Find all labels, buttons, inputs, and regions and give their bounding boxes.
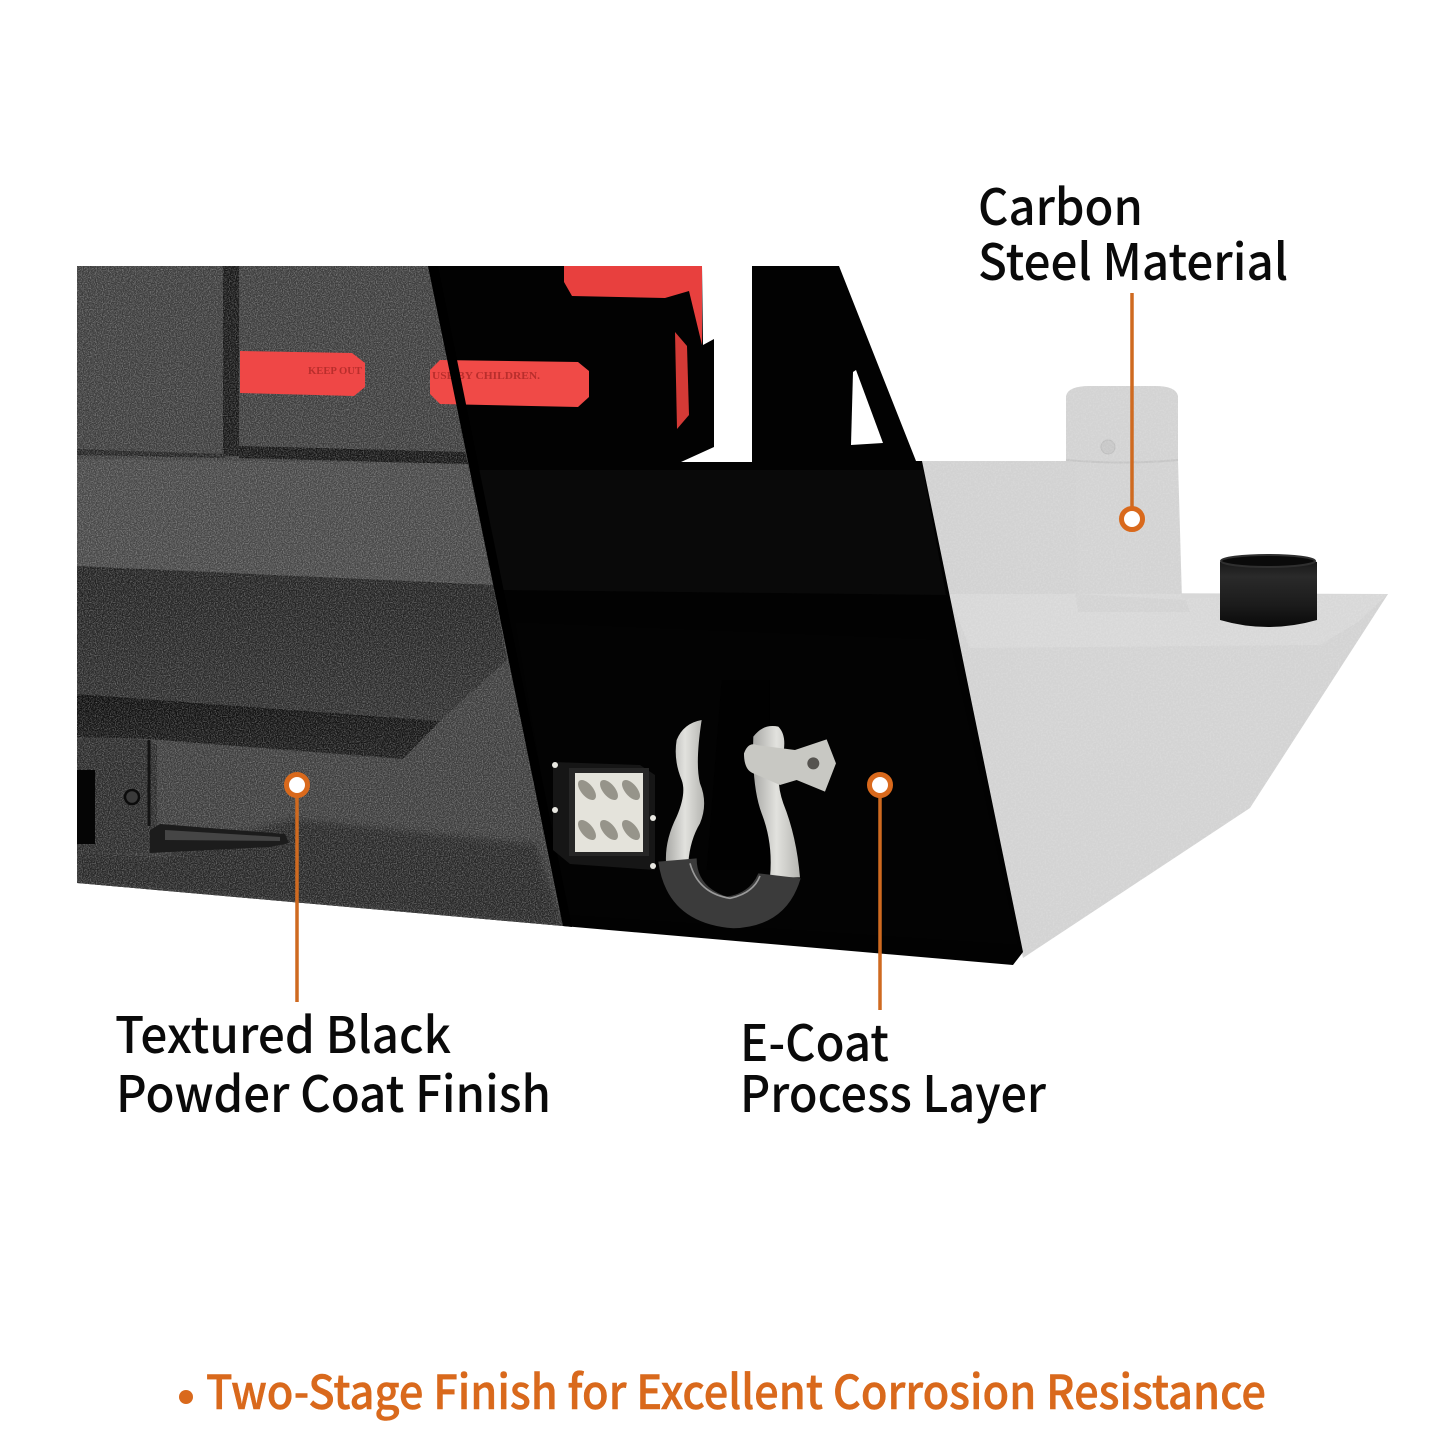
groove [223, 266, 239, 456]
coat band [77, 459, 493, 585]
shadow at bottom [77, 819, 563, 926]
lower body [77, 660, 563, 926]
white triangle [851, 370, 883, 445]
callout: carbon steel material [978, 168, 1288, 530]
pin hole [807, 757, 819, 769]
seam strip [428, 266, 572, 927]
callout: e-coat process layer [740, 774, 1047, 1127]
icon: D-ring shackle [658, 680, 836, 928]
red tab: keep out [240, 351, 365, 396]
callout: carbon steel material: Steel Material [978, 223, 1288, 295]
callout: textured black powder coat: Powder Coat Finish [116, 1055, 551, 1127]
panel: e-coat section (black) [428, 266, 1023, 965]
post cap line [1066, 460, 1178, 462]
rubber boot [658, 858, 801, 928]
callout: e-coat process layer: E-Coat [740, 1004, 889, 1076]
callout: e-coat process layer: Process Layer [740, 1055, 1047, 1127]
hitch body [77, 737, 157, 853]
callout: carbon steel material: Carbon [978, 168, 1143, 240]
red tab: by children [430, 360, 589, 407]
red tab: by children: USE BY CHILDREN. [432, 371, 541, 382]
callout: textured black powder coat: Textured Black [115, 996, 451, 1068]
e-coat band [474, 470, 946, 595]
panel: carbon steel section (light) [922, 385, 1392, 960]
footer note: Two-Stage Finish for Excellent Corrosion Resistance [206, 1354, 1266, 1423]
recess [77, 694, 440, 759]
lower dark band [77, 566, 507, 721]
pin [744, 739, 836, 792]
icon: LED work light [552, 762, 656, 870]
steel box [922, 461, 1080, 594]
post bolt [1101, 440, 1115, 454]
strap [707, 680, 770, 870]
seam [239, 446, 468, 464]
red tab: keep out: KEEP OUT [308, 366, 362, 377]
panel: textured powder coat section [77, 266, 567, 931]
steel post [1066, 386, 1186, 612]
left leg [666, 720, 704, 863]
steel grain [992, 418, 1292, 892]
red sliver [675, 332, 689, 429]
grain [77, 266, 567, 931]
hitch receiver details [77, 740, 289, 853]
callout: textured black powder coat [115, 774, 551, 1127]
right leg [753, 726, 800, 877]
red block top [564, 266, 702, 345]
icon: rubber bumper [1220, 555, 1317, 627]
infographic canvas [77, 185, 1388, 1421]
steel deck [948, 594, 1388, 648]
white notch [681, 266, 752, 462]
e-coat lower [515, 622, 1018, 945]
post base flange [1075, 594, 1190, 612]
